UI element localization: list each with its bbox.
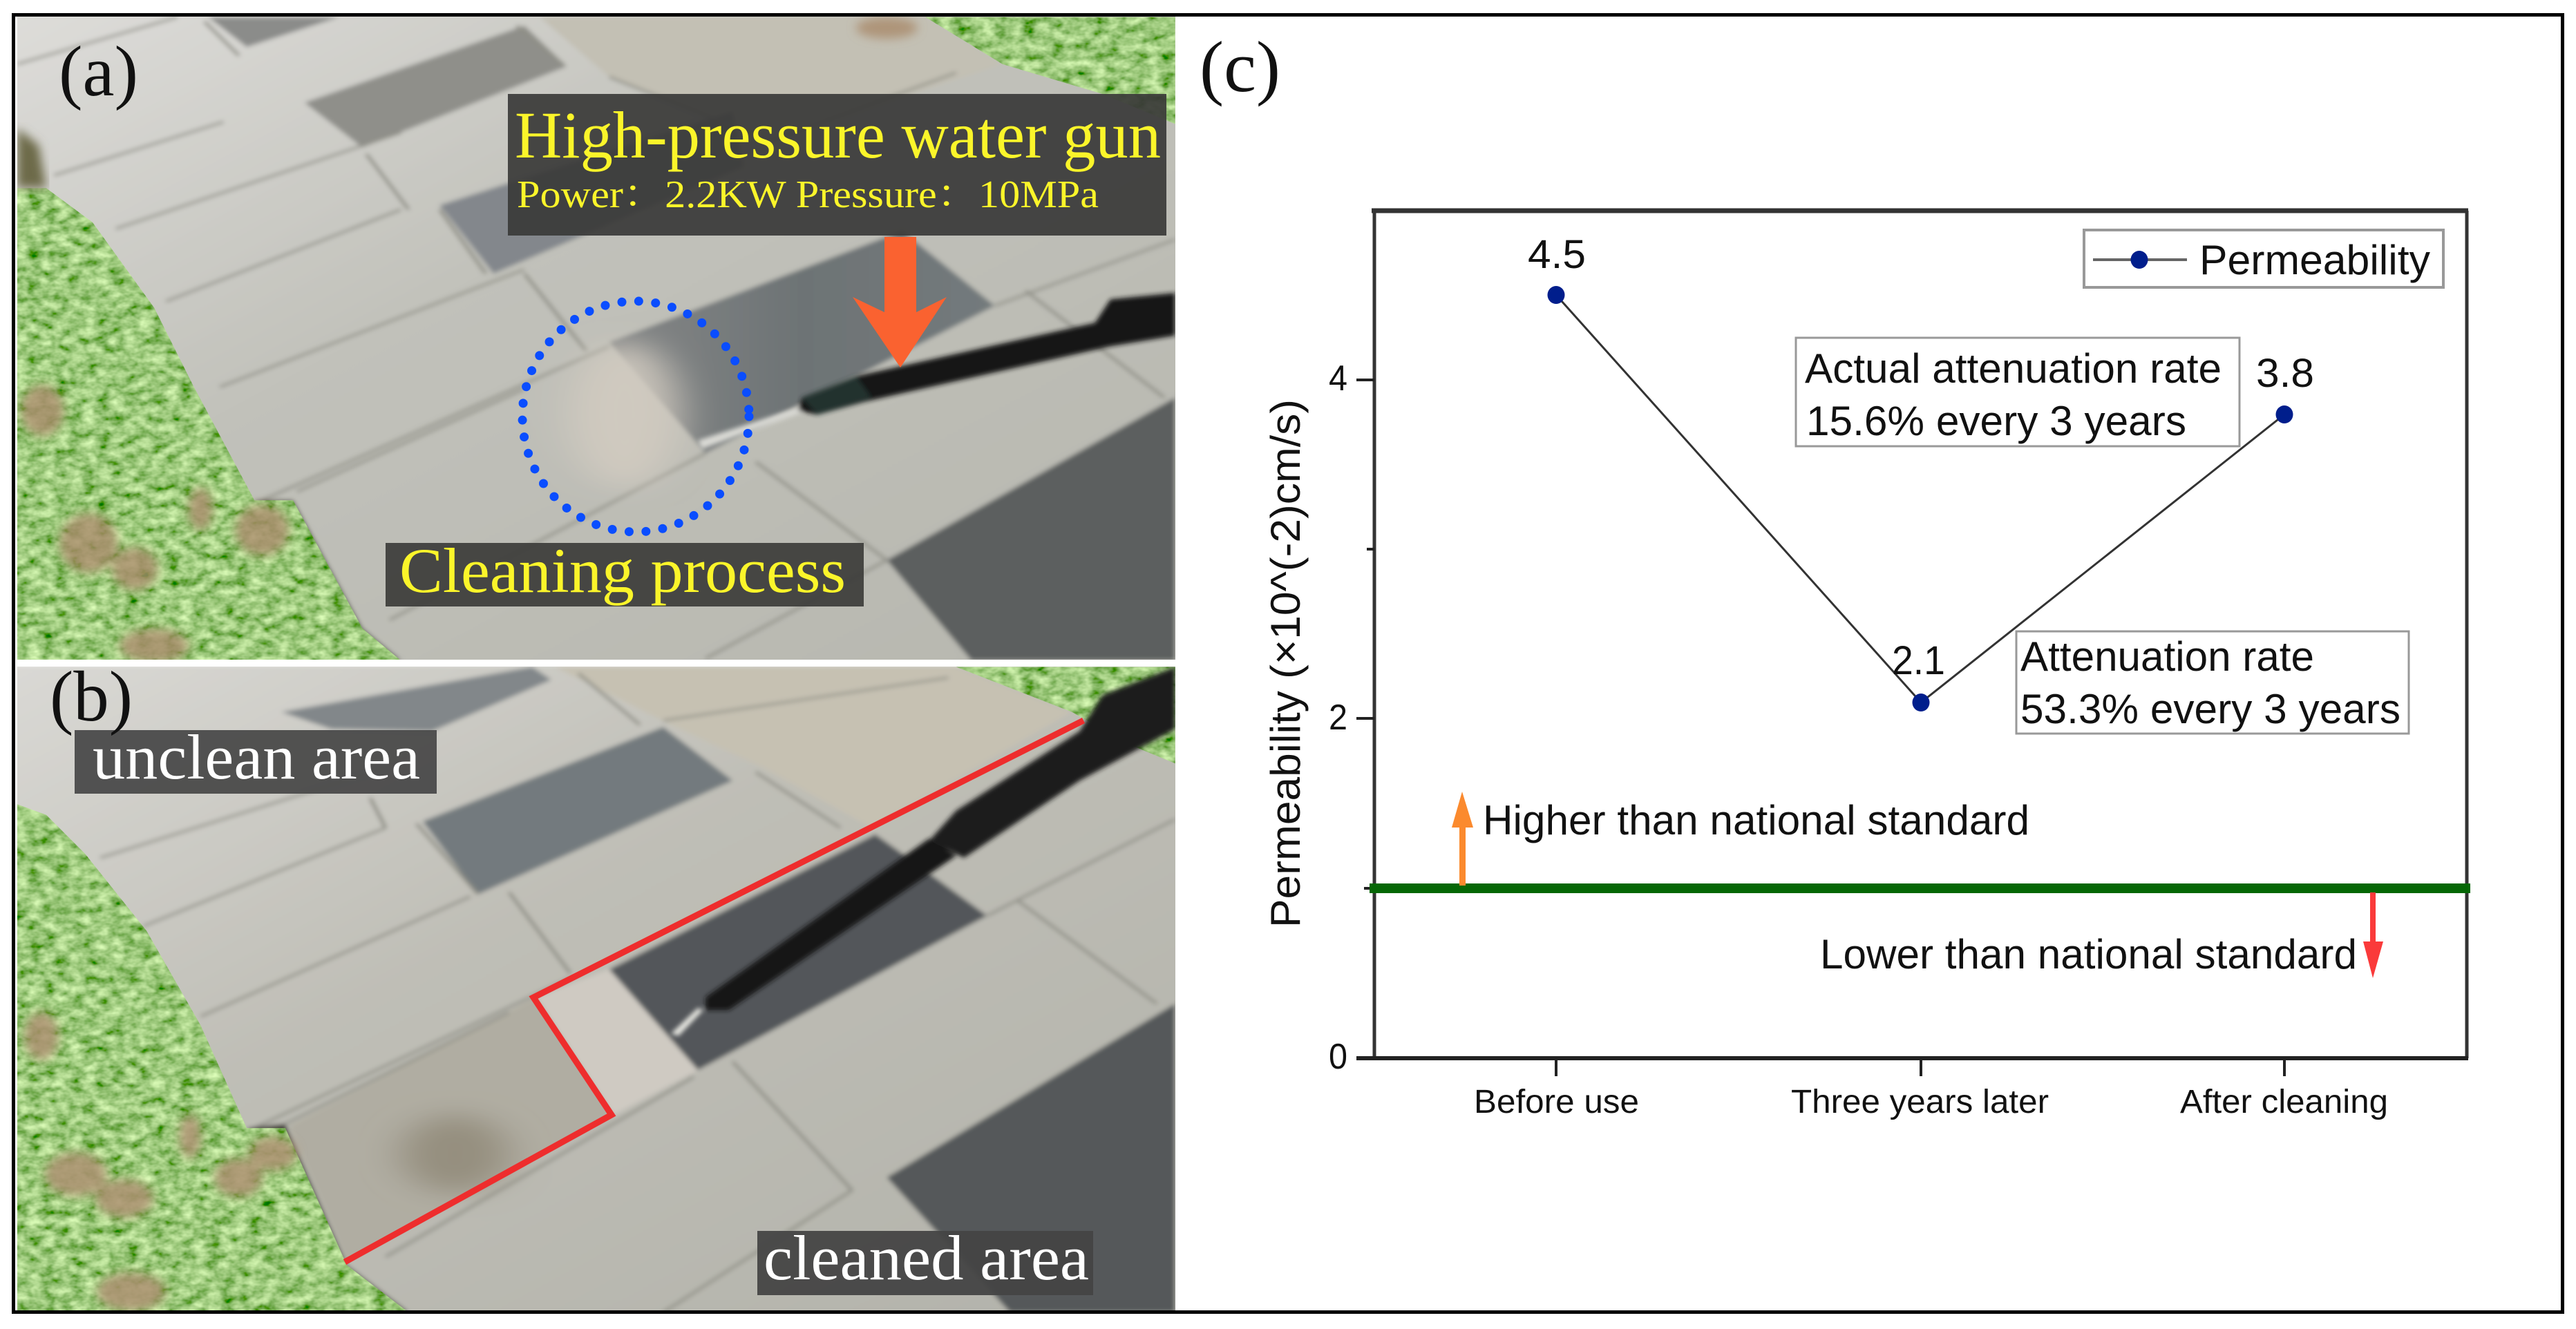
data value labels	[1528, 232, 2314, 683]
panel c: permeability chart	[1200, 26, 2470, 1120]
arrow: lower than standard	[2363, 892, 2383, 978]
spray lance in photo a	[698, 293, 1175, 449]
data value labels: 4.5	[1528, 232, 1586, 277]
callout: high-pressure water gun: High-pressure water gun	[515, 98, 1161, 172]
photo b: pavement scene	[0, 664, 1234, 1326]
callout: high-pressure water gun	[508, 94, 1166, 236]
arrow: higher than standard	[1452, 792, 1473, 886]
y axis tick labels: 4	[1329, 358, 1347, 399]
legend: Permeability	[2199, 237, 2430, 283]
x axis labels: Before use	[1474, 1084, 1639, 1120]
callout: attenuation rate: 53.3% every 3 years	[2020, 686, 2400, 732]
x axis labels: After cleaning	[2180, 1084, 2388, 1120]
text: higher than national standard: Higher than national standard	[1483, 797, 2029, 843]
grass in photo b	[17, 667, 1175, 1312]
dirt edge in photo a	[17, 128, 46, 188]
photo a: pavement scene	[0, 8, 1234, 667]
callout: actual attenuation rate: Actual attenuation rate	[1805, 345, 2222, 392]
callout: high-pressure water gun: Power：2.2KW Pressure：10MPa	[517, 173, 1099, 216]
grass in photo a	[17, 17, 1175, 660]
callout: actual attenuation rate	[1796, 338, 2239, 446]
x axis labels	[1474, 1084, 2388, 1120]
axes and ticks	[1356, 211, 2468, 1076]
callout: actual attenuation rate: 15.6% every 3 years	[1806, 398, 2186, 444]
data value labels: 2.1	[1892, 638, 1945, 683]
callout: cleaning process: Cleaning process	[399, 535, 846, 606]
label: unclean area: unclean area	[93, 722, 420, 792]
panel a: cleaning process photo	[0, 8, 1234, 667]
dotted circle: cleaning spot	[522, 301, 749, 532]
spray lance in photo b	[671, 667, 1175, 1036]
fallen leaves in photo a	[21, 17, 918, 662]
label (b): (b)	[50, 657, 133, 736]
arrow: points to water gun	[853, 237, 947, 367]
x axis labels: Three years later	[1791, 1084, 2049, 1120]
y axis tick labels: 2	[1329, 698, 1347, 738]
boundary line: cleaned and unclean areas	[345, 720, 1083, 1262]
permeability line series	[1548, 286, 2293, 711]
national standard line	[1370, 883, 2470, 893]
callout: attenuation rate	[2016, 631, 2409, 734]
callout: attenuation rate: Attenuation rate	[2020, 633, 2314, 680]
y axis tick labels: 0	[1329, 1037, 1347, 1077]
legend	[2084, 230, 2443, 287]
label (c): (c)	[1200, 26, 1280, 107]
y axis title: Permeability (×10^(-2)cm/s)	[1262, 399, 1309, 928]
y axis tick labels	[1329, 358, 1347, 1077]
panel b: cleaned vs unclean photo	[0, 657, 1234, 1326]
text: lower than national standard: Lower than national standard	[1820, 931, 2357, 977]
label: cleaned area: cleaned area	[764, 1223, 1089, 1293]
fallen leaves in photo b	[24, 1012, 297, 1311]
data value labels: 3.8	[2256, 351, 2314, 396]
label (a): (a)	[59, 32, 138, 111]
